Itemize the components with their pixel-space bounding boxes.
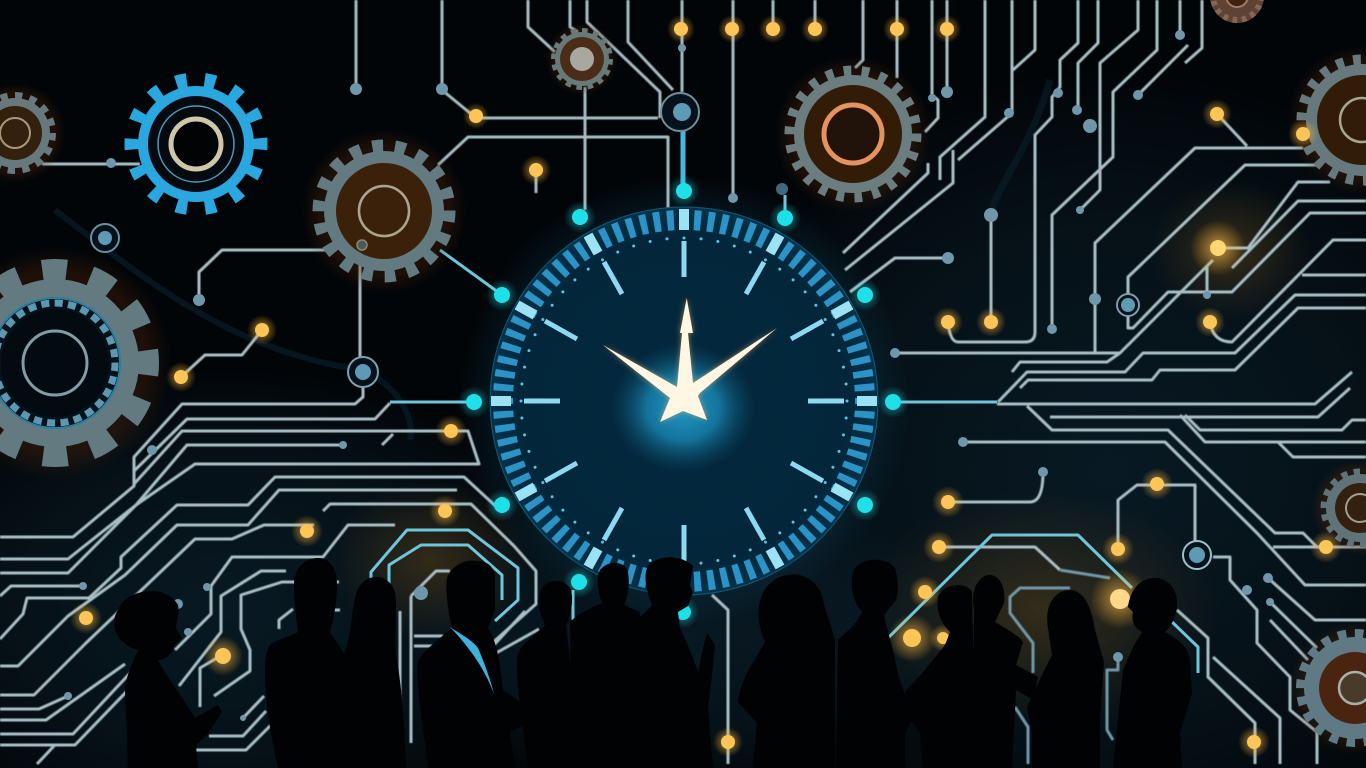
gear: small top centre <box>546 23 618 95</box>
grey nodes <box>64 30 1274 721</box>
hour ticks <box>524 241 844 561</box>
gear: right upper <box>1288 46 1366 194</box>
person 12 <box>1027 590 1104 768</box>
gear: brown upper left <box>302 129 466 293</box>
circuit traces: top right <box>843 0 1366 402</box>
hands glow <box>603 298 777 422</box>
gear: right middle <box>1312 460 1366 556</box>
gear: large left <box>0 247 171 479</box>
person 6 <box>570 563 640 768</box>
person 7 <box>628 557 715 768</box>
person 10 <box>902 585 976 768</box>
gear: top edge right <box>1210 0 1264 23</box>
blue tie accent <box>450 627 494 694</box>
person 3 <box>335 577 406 768</box>
clock face <box>490 207 878 595</box>
clock <box>490 207 878 595</box>
circuit traces: right middle and lower right <box>712 372 1366 764</box>
silhouettes: crowd of people <box>114 557 1192 768</box>
dotted inner ring <box>521 238 847 564</box>
gear: blue <box>132 80 260 208</box>
major outer ticks <box>491 209 877 593</box>
person 13 <box>1113 578 1192 768</box>
circuit traces: left bundle <box>0 164 539 764</box>
ring nodes <box>91 93 1211 569</box>
person 8 <box>738 574 835 768</box>
person 9 <box>836 560 913 768</box>
person 5 <box>517 581 582 768</box>
gear: top left <box>0 83 65 183</box>
clock hands <box>603 298 777 422</box>
circuit traces: teal accents <box>371 130 1198 673</box>
minute tick ring <box>503 220 865 582</box>
person 2 <box>265 558 350 768</box>
teal nodes <box>458 175 909 628</box>
circuit traces: top centre <box>356 0 863 210</box>
gear: top right orange ring <box>775 56 931 212</box>
person 11 <box>972 575 1038 768</box>
gear: right lower <box>1289 622 1366 754</box>
person 4 <box>417 561 535 768</box>
clock centre glow <box>611 344 755 472</box>
person 1 <box>114 591 222 768</box>
circuit traces: faint blue-grey lower centre <box>1010 570 1118 764</box>
